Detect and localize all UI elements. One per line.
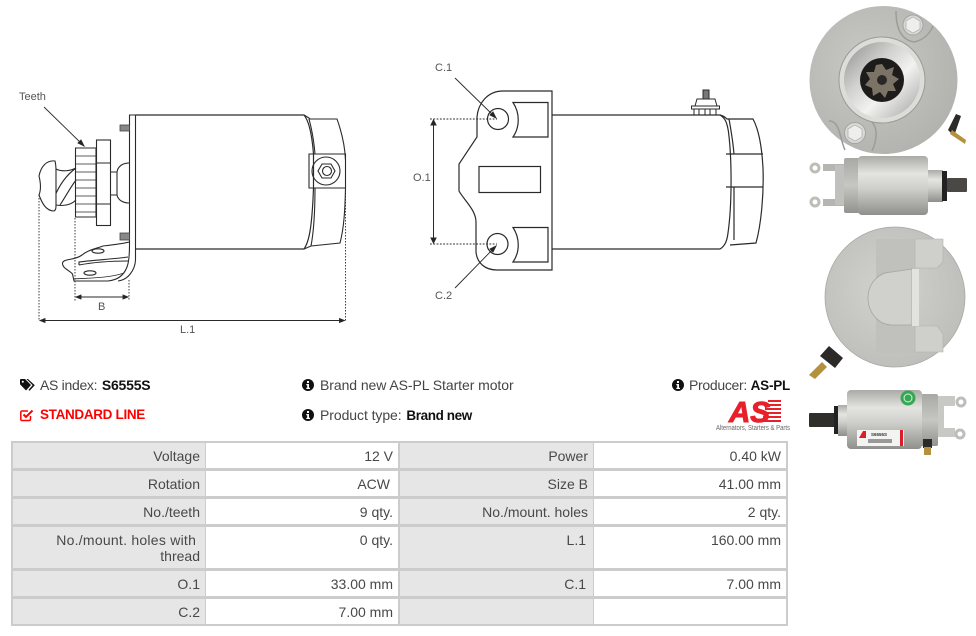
- specification table: 2 qty.: [748, 504, 781, 520]
- row: threaded holes / L.1: [13, 527, 205, 568]
- specification table: 33.00 mm: [331, 576, 393, 592]
- icon: info: [672, 379, 684, 391]
- arrow to hole C.1: [455, 78, 496, 118]
- label: L.1: L.1: [180, 324, 195, 336]
- icon: tags: [20, 379, 35, 391]
- specification table: 0 qty.: [360, 532, 393, 548]
- photo: side view with shaft left and label: [809, 390, 966, 455]
- info row: product type: [302, 407, 472, 423]
- specification table: [11, 441, 788, 626]
- specification table: No./mount. holes: [482, 504, 588, 520]
- label: C.2: C.2: [435, 290, 452, 302]
- photo: side view with shaft right: [810, 156, 967, 215]
- icon: info: [302, 379, 314, 391]
- info row: standard line: [20, 407, 145, 422]
- info row: producer: [672, 377, 790, 393]
- specification table: L.1: [567, 532, 586, 548]
- text: product type: Product type: Brand new: [320, 407, 472, 423]
- icon: red checkbox: [20, 410, 34, 422]
- icon: info: [302, 409, 314, 421]
- specification table: 9 qty.: [360, 504, 393, 520]
- text: standard line: STANDARD LINE: [40, 407, 145, 422]
- row: teeth / mounting holes: No./teeth: [143, 504, 200, 520]
- text: description: Brand new AS-PL Starter motor: [320, 377, 514, 393]
- row: teeth / mounting holes: [13, 499, 205, 524]
- row: Voltage / Power: [13, 443, 205, 468]
- text: AS index value: AS index: S6555S: [40, 377, 150, 393]
- row: threaded holes / L.1: thread: [160, 548, 200, 564]
- label: Teeth: Teeth: [19, 91, 46, 103]
- helical shaft and nose: [39, 161, 76, 211]
- dimension O.1: [430, 119, 497, 244]
- teeth arrow: [44, 107, 84, 146]
- arrow to hole C.2: [455, 246, 496, 288]
- specification table: Power: [548, 448, 588, 464]
- row: C.2 / empty: [13, 599, 205, 624]
- specification table: 0.40 kW: [730, 448, 781, 464]
- specification table: 7.00 mm: [727, 576, 781, 592]
- label: C.1: C.1: [435, 62, 452, 74]
- row: Rotation / Size B: [13, 471, 205, 496]
- logo stripes: [762, 400, 781, 422]
- specification table: 41.00 mm: [719, 476, 781, 492]
- motor body: [136, 115, 346, 249]
- row: O.1 / C.1: [13, 571, 205, 596]
- terminal stud: [692, 90, 720, 115]
- text: producer: Producer: AS-PL: [689, 377, 790, 393]
- info row: description: [302, 377, 514, 393]
- logo letters: AS: [728, 397, 771, 429]
- row: Rotation / Size B: Rotation: [148, 476, 200, 492]
- row: threaded holes / L.1: No./mount. holes with: [56, 532, 196, 548]
- bracket flange and foot: [62, 115, 136, 281]
- photo: side view with shaft left and label: S6555S: [871, 432, 887, 437]
- motor body: [552, 115, 763, 249]
- specification table: ACW: [357, 476, 390, 492]
- specification table: C.1: [564, 576, 586, 592]
- specification table: Size B: [548, 476, 588, 492]
- pinion gear with teeth: [76, 140, 129, 226]
- specification table: 160.00 mm: [711, 532, 781, 548]
- dimension lines: B and L.1: [39, 190, 346, 322]
- row: O.1 / C.1: O.1: [177, 576, 200, 592]
- photo: rear bracket view: [809, 227, 965, 379]
- label: B: B: [98, 301, 105, 313]
- row: Voltage / Power: Voltage: [153, 448, 200, 464]
- specification table: 12 V: [364, 448, 393, 464]
- row: C.2 / empty: C.2: [178, 604, 200, 620]
- hex bolt on end cap: [309, 154, 346, 188]
- label: O.1: O.1: [413, 172, 431, 184]
- logo tagline: Alternators, Starters & Parts: [716, 425, 790, 432]
- mounting plate: [459, 91, 552, 270]
- photo: pinion end view: [810, 6, 966, 154]
- info row: AS index: [20, 377, 150, 393]
- mounting studs: [120, 125, 130, 240]
- specification table: 7.00 mm: [339, 604, 393, 620]
